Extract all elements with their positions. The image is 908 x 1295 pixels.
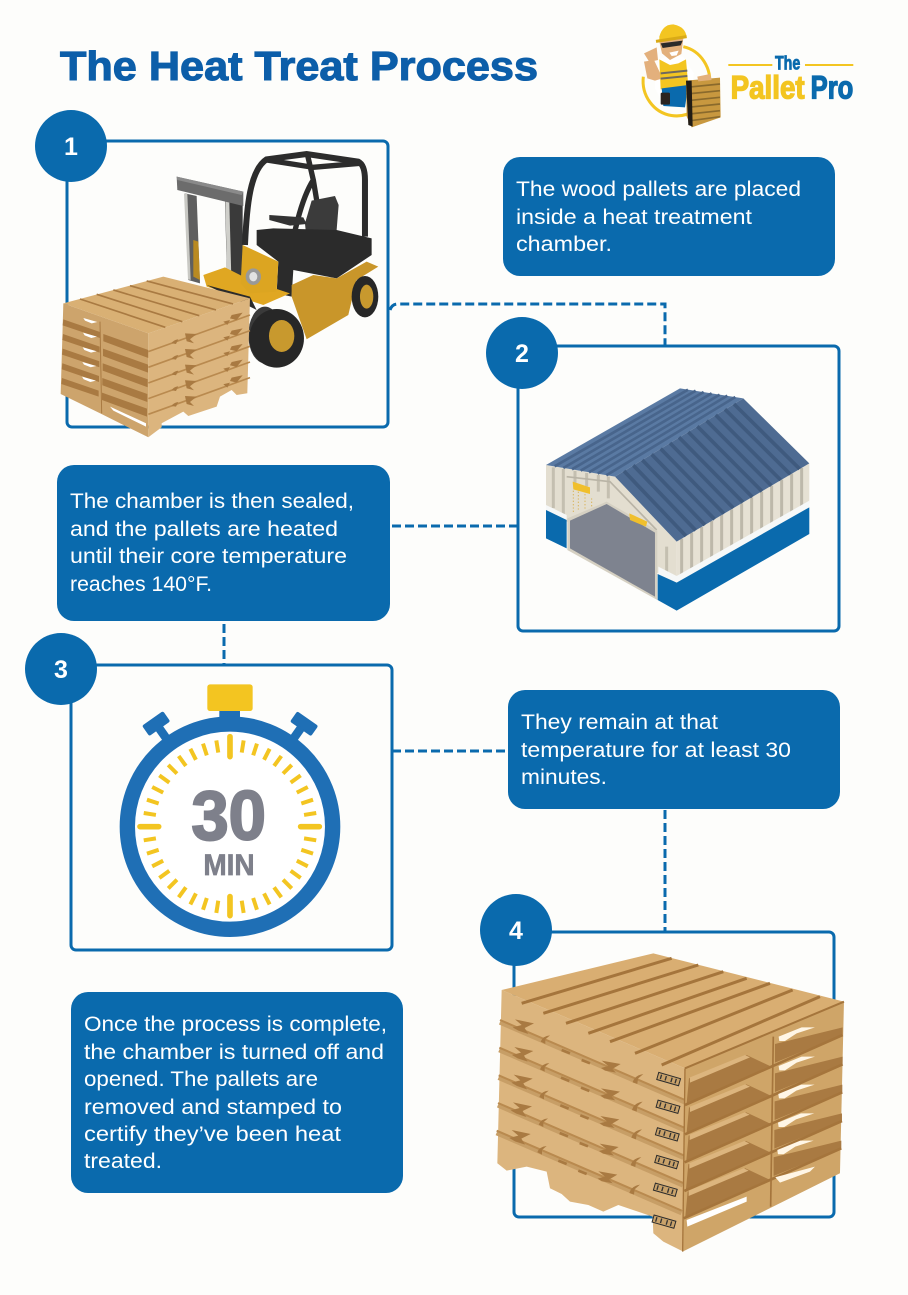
icon: pallet stack with stamps [497, 953, 844, 1252]
callout: step 4 description: the chamber is turned off and [84, 1041, 384, 1064]
step number 2 [486, 317, 558, 389]
step number 1: 1 [64, 133, 78, 161]
callout: step 4 description: removed and stamped to [84, 1096, 342, 1119]
callout: step 1 description: inside a heat treatment [516, 206, 752, 229]
panel 4 frame [514, 932, 834, 1217]
callout: step 4 description: certify they’ve been heat [84, 1123, 341, 1146]
panel 1 frame [67, 141, 388, 427]
dashed connector: step 3 to callout 3 [392, 750, 508, 752]
panel 2: heat treatment chamber [486, 317, 839, 631]
callout: step 2 description [57, 465, 390, 621]
icon: 30 minute stopwatch: 30 [191, 776, 266, 854]
callout: step 1 description: chamber. [516, 233, 612, 256]
logo worker mascot [644, 24, 694, 107]
callout: step 1 description: The wood pallets are placed [516, 178, 801, 201]
callout: step 1 description [503, 157, 835, 276]
title: The Heat Treat Process [60, 43, 538, 89]
callout: step 3 description: minutes. [521, 766, 607, 789]
dashed connector: step 1 to step 2 [390, 304, 665, 346]
logo wordmark: Pallet [731, 69, 805, 105]
logo ring [643, 47, 710, 116]
icon: forklift with pallets [61, 154, 378, 437]
icon: 30 minute stopwatch: MIN [203, 849, 255, 882]
forklift [177, 154, 378, 368]
callout: step 4 description: opened. The pallets are [84, 1068, 318, 1091]
callout: step 4 description: treated. [84, 1150, 162, 1173]
panel 4: stamped pallet stack [480, 894, 844, 1252]
icon: heat treatment chamber building [546, 388, 809, 611]
step number 3: 3 [54, 656, 68, 684]
logo wordmark [728, 53, 853, 105]
panel 2 frame [518, 346, 839, 631]
callout: step 2 description: and the pallets are heated [70, 518, 338, 541]
callout: step 4 description [71, 992, 403, 1193]
callout: step 3 description: temperature for at least 30 [521, 739, 791, 762]
step number 4: 4 [509, 917, 523, 945]
panel 3: stopwatch [25, 633, 392, 950]
logo pallet [686, 74, 721, 127]
step number 3 [25, 633, 97, 705]
callout: step 2 description: The chamber is then sealed, [70, 490, 354, 513]
callout: step 3 description: They remain at that [521, 711, 718, 734]
panel 1: forklift [35, 110, 388, 437]
logo wordmark: Pro [811, 69, 853, 105]
callout: step 4 description: Once the process is complete, [84, 1013, 387, 1036]
icon: 30 minute stopwatch [127, 684, 333, 929]
panel 3 frame [71, 665, 392, 950]
dashed connector: callout 2 to step 2 [392, 524, 518, 528]
step number 4 [480, 894, 552, 966]
callout: step 3 description [508, 690, 840, 809]
dashed connector: callout 2 to step 3 [222, 624, 226, 665]
dashed connector: callout 3 to step 4 [664, 810, 666, 932]
step number 2: 2 [515, 340, 529, 368]
pallet stack [61, 277, 250, 437]
callout: step 2 description: reaches 140°F. [70, 573, 212, 596]
logo: The Pallet Pro [643, 24, 853, 127]
logo wordmark: The [775, 53, 800, 74]
step number 1 [35, 110, 107, 182]
callout: step 2 description: until their core temperature [70, 545, 347, 568]
